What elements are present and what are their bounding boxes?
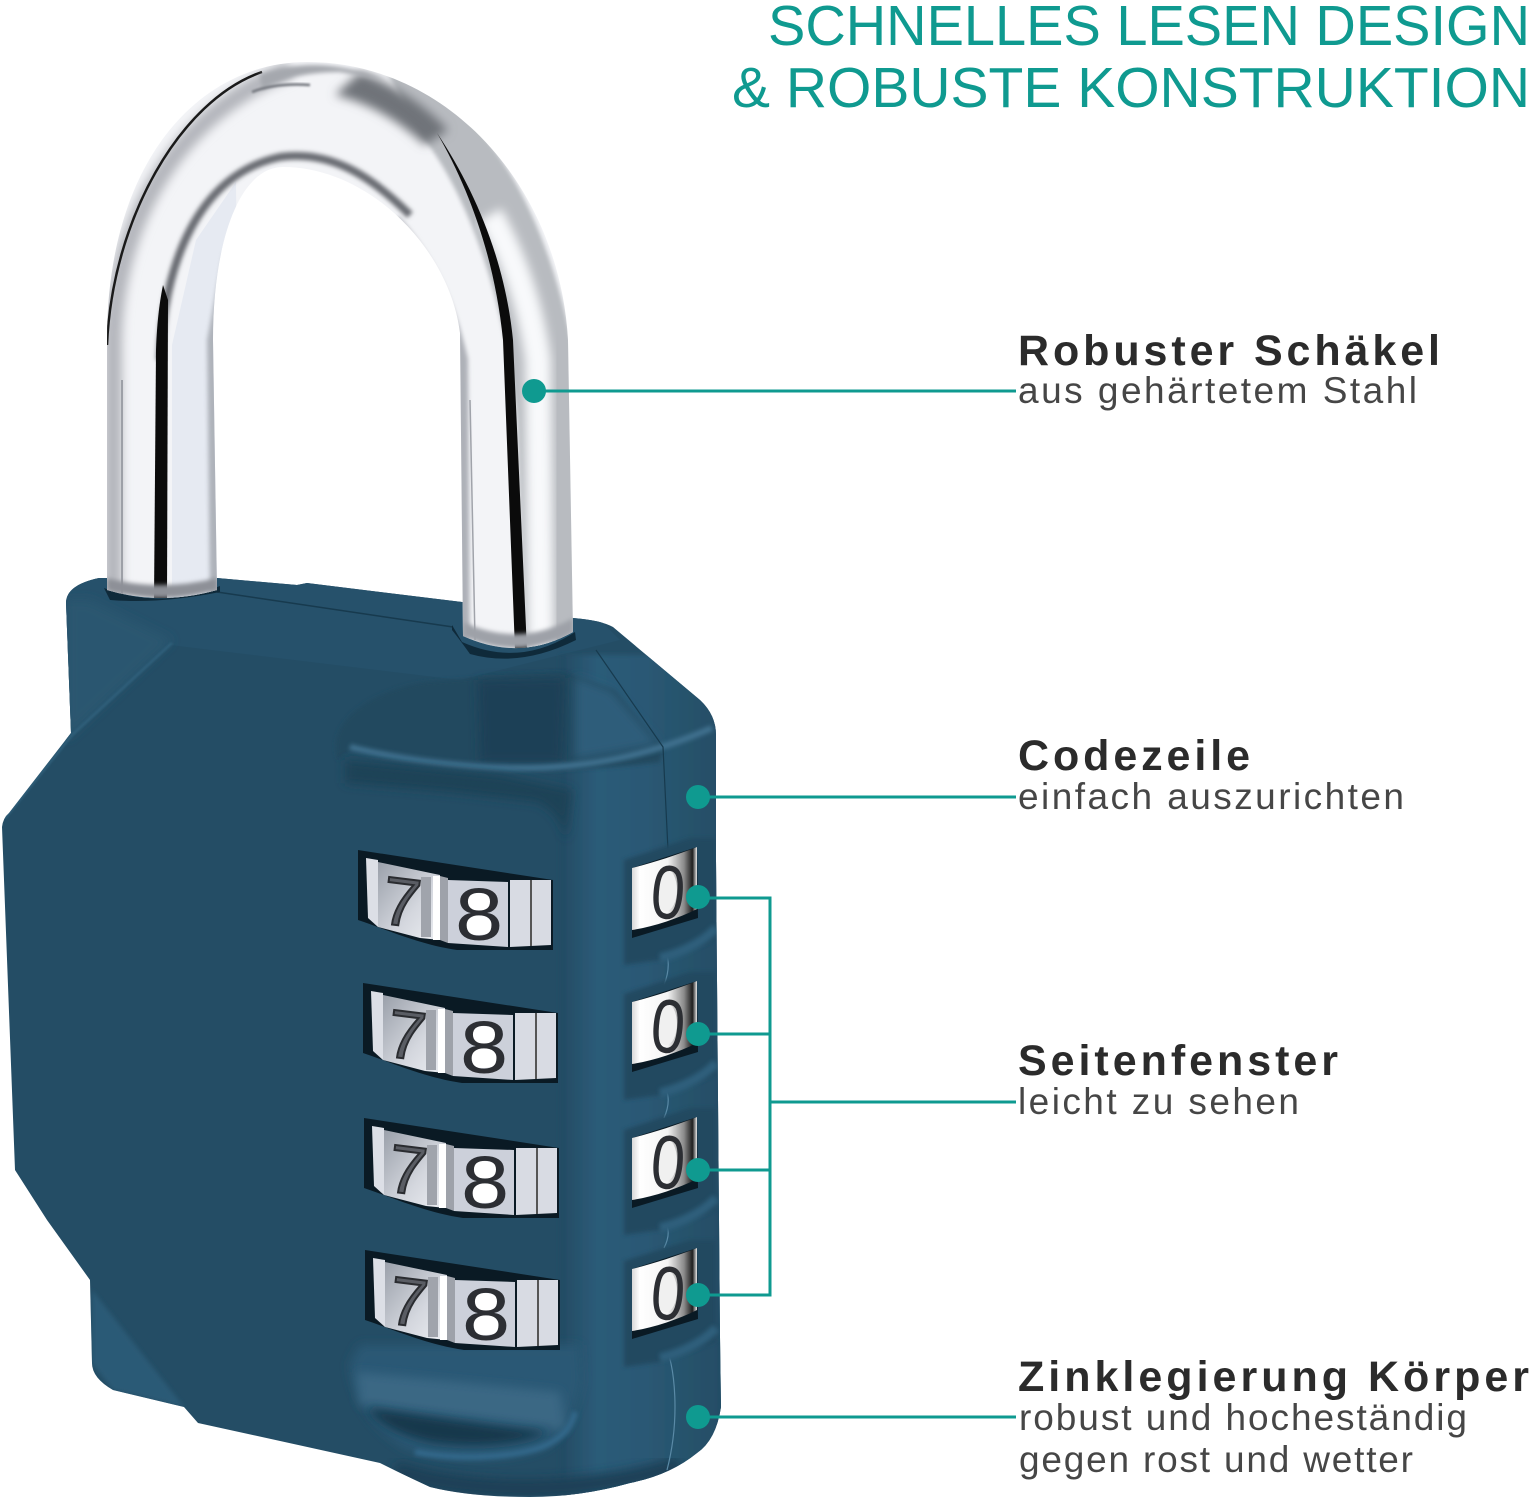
label: shackle: Robuster Schäkel bbox=[1018, 327, 1440, 375]
seams bbox=[217, 592, 453, 627]
side window 3 bbox=[632, 1117, 698, 1208]
shackle bbox=[100, 55, 580, 665]
upper back plate bbox=[65, 578, 604, 740]
label: side windows: leicht zu sehen bbox=[1018, 1081, 1299, 1122]
dial 2: 7 bbox=[383, 995, 430, 1075]
dial 1: 7 bbox=[378, 862, 425, 942]
dial 3 bbox=[364, 1118, 559, 1225]
lower-left wedge bbox=[92, 1290, 184, 1407]
dial 4 bbox=[365, 1250, 560, 1357]
label: zinc body: Zinklegierung Körper bbox=[1018, 1353, 1529, 1401]
label: shackle: aus gehärtetem Stahl bbox=[1018, 370, 1417, 411]
label: zinc body: gegen rost und wetter bbox=[1019, 1439, 1413, 1480]
label: zinc body bbox=[1018, 1353, 1529, 1480]
side window 1 bbox=[632, 847, 698, 938]
shackle base shadows bbox=[104, 586, 220, 601]
title bbox=[732, 0, 1530, 120]
label: code line bbox=[1018, 732, 1404, 817]
label: code line: Codezeile bbox=[1018, 732, 1250, 780]
lock body bbox=[0, 570, 730, 1500]
label: zinc body: robust und hocheständig bbox=[1019, 1397, 1467, 1438]
connector: side windows bracket bbox=[686, 885, 1016, 1307]
dial 1 bbox=[358, 850, 553, 957]
dial 2: 8 bbox=[460, 1007, 508, 1090]
label: side windows: Seitenfenster bbox=[1018, 1037, 1338, 1085]
dial 2 bbox=[363, 983, 558, 1090]
side window 1: 0 bbox=[648, 849, 689, 936]
side grooves bbox=[624, 838, 716, 965]
label: shackle bbox=[1018, 327, 1440, 411]
dial 4: 7 bbox=[385, 1262, 432, 1342]
label: side windows bbox=[1018, 1037, 1338, 1122]
padlock illustration bbox=[0, 55, 730, 1500]
side window 2 bbox=[632, 981, 698, 1072]
title: & ROBUSTE KONSTRUKTION bbox=[732, 56, 1530, 120]
connector: code line bbox=[686, 785, 1016, 809]
dial 3: 7 bbox=[384, 1130, 431, 1210]
lower bump bbox=[350, 1345, 582, 1458]
dial 4: 8 bbox=[462, 1274, 510, 1357]
side window 4: 0 bbox=[648, 1250, 689, 1337]
connector: shackle bbox=[522, 379, 1016, 403]
side window 3: 0 bbox=[648, 1119, 689, 1206]
connector: zinc body bbox=[686, 1405, 1016, 1429]
label: code line: einfach auszurichten bbox=[1018, 776, 1404, 817]
upper bump bbox=[567, 676, 662, 769]
side window 4 bbox=[632, 1248, 698, 1339]
dial 1: 8 bbox=[455, 874, 503, 957]
dial 3: 8 bbox=[461, 1142, 509, 1225]
right side column bbox=[560, 655, 730, 1500]
side window 2: 0 bbox=[648, 983, 689, 1070]
